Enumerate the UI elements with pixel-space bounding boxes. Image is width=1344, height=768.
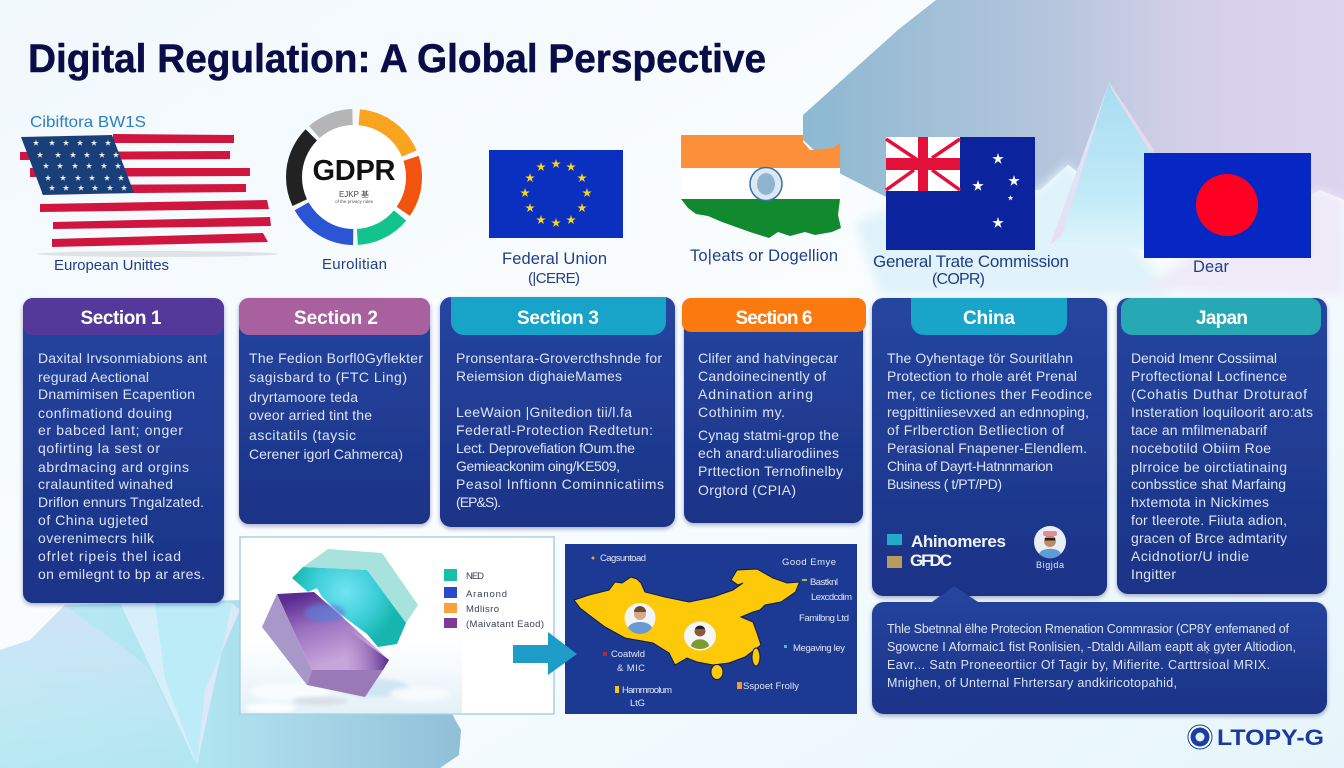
- text block: Section 3 body: LeeWaion |Gnitedion tii/l.fa: [456, 404, 632, 420]
- text block: Section 1 body: er babced lant; onger: [38, 422, 183, 438]
- map labels: [592, 553, 852, 709]
- text block: Section 6 body: [698, 350, 843, 498]
- text block: Section 6 body: Adnination aring: [698, 386, 813, 402]
- text block: Section 3 body: Gemieackonim oing/KE509,: [456, 458, 620, 474]
- text block: China body: Protection to rhole arét Prenal: [887, 368, 1077, 384]
- flag block: United States: European Unittes: [54, 257, 169, 274]
- flag block: Australia: General Trate Commission: [873, 252, 1069, 271]
- text block: Section 6 body: Candoinecinently of: [698, 368, 826, 384]
- legend: crystal chart: NED: [466, 571, 484, 582]
- text block: China body: of Frlberction Betliection of: [887, 422, 1064, 438]
- text block: Japan body: for tleerote. Fiiuta adion,: [1131, 512, 1287, 528]
- text block: Section 6 body: Cothinim my.: [698, 404, 785, 420]
- GDPR ring badge: EJKP 基: [339, 189, 369, 199]
- panel: crystal chart: [240, 537, 554, 714]
- title: Digital Regulation: A Global Perspective: [28, 37, 766, 81]
- panel: Section 1: [23, 298, 224, 603]
- text block: Section 6 body: ech anard:uliarodiines: [698, 445, 839, 461]
- panel: China: [872, 298, 1107, 596]
- panel: Section 3: [440, 297, 675, 527]
- flag block: Australia: (COPR): [932, 271, 985, 288]
- text block: Section 3 body: Reiemsion dighaieMames: [456, 368, 622, 384]
- flag block: European Union: [489, 150, 623, 287]
- GDPR ring badge: of the privacy rules: [335, 199, 374, 204]
- text block: Section 3 body: [456, 350, 664, 510]
- icon: map portrait right: [684, 622, 716, 650]
- text block: Japan body: Proftectional Locfinence: [1131, 368, 1287, 384]
- heading: Japan: [1121, 298, 1321, 335]
- text block: Section 2 body: The Fedion Borfl0Gyflekter: [249, 350, 423, 366]
- icon: portrait: [1034, 526, 1066, 570]
- text block: Section 2 body: Cerener igorl Cahmerca): [249, 446, 403, 462]
- legend: crystal chart: Mdlisro: [466, 604, 499, 615]
- text block: Section 3 body: Lect. Deprovefiation fOum.the: [456, 440, 635, 456]
- flag block: India: To|eats or Dogellion: [690, 247, 838, 265]
- heading: Section 6: Section 6: [736, 308, 812, 329]
- heading: Section 3: [451, 297, 666, 335]
- text block: Section 1 body: abrdmacing ard orgins: [38, 459, 189, 475]
- map labels: Bastknl: [810, 577, 838, 588]
- text block: China body: Perasional Fnapener-Elendlem.: [887, 440, 1087, 456]
- text block: Section 6 body: Orgtord (CPIA): [698, 482, 796, 498]
- text block: Japan body: hxtemota in Nickimes: [1131, 494, 1269, 510]
- icon: map portrait left: [624, 603, 656, 634]
- icon: purple crystal: [262, 592, 389, 697]
- heading: Section 6: [682, 298, 866, 332]
- text block: Section 3 body: Peasol Inftionn Cominnicatiims: [456, 476, 664, 492]
- panel: Section 6: [682, 298, 866, 523]
- callout: bottom right: Sgowcne I Aformaic1 fist Ronlisien, -Dtaldı Aillam eaptt aķ gyter Altiodion,: [887, 640, 1296, 654]
- text block: China body: [887, 350, 1092, 492]
- legend: China agencies: Ahinomeres: [911, 532, 1006, 551]
- text block: Japan body: Ingitter: [1131, 566, 1176, 582]
- callout: bottom right: Eavr... Satn Proneeortiicr Of Tagir by, Mifierite. Carttrsioal MRIX.: [887, 658, 1270, 672]
- text block: Section 1 body: Dnamimisen Ecapention: [38, 386, 195, 402]
- flag block: European Union: (|CERE): [528, 270, 580, 287]
- text block: Japan body: Insteration loquiloorit aro:ats: [1131, 404, 1313, 420]
- legend: crystal chart: [444, 569, 544, 630]
- map labels: Good Emye: [782, 557, 836, 568]
- text block: China body: mer, ce tictiones ther Feodince: [887, 386, 1092, 402]
- flag block: United States: Cibiftora BW1S: [30, 114, 146, 131]
- map labels: Megaving ley: [793, 643, 845, 654]
- text block: Section 2 body: sagisbard to (FTC Ling): [249, 369, 407, 385]
- text block: Section 2 body: oveor arried tint the: [249, 407, 372, 423]
- map labels: Sspoet Frolly: [743, 681, 799, 692]
- text block: Section 1 body: [38, 350, 207, 582]
- text block: China body: China of Dayrt-Hatnnmarion: [887, 458, 1053, 474]
- text block: Japan body: Acidnotior/U indie: [1131, 548, 1249, 564]
- map labels: Lexcdcdim: [811, 592, 852, 603]
- map labels: Hammroolum: [622, 685, 672, 696]
- text block: Section 6 body: Cynag statmi-grop the: [698, 427, 839, 443]
- callout: bottom right: [872, 586, 1327, 714]
- arrow: [513, 632, 577, 675]
- text block: Section 1 body: of China ugjeted: [38, 512, 148, 528]
- text block: Section 2 body: [249, 350, 423, 462]
- text block: China body: regpittiniiesevxed an ednnoping,: [887, 404, 1089, 420]
- text block: Section 1 body: qofirting la sest or: [38, 440, 160, 456]
- heading: Section 1: Section 1: [80, 308, 162, 329]
- text block: Section 2 body: ascitatils (taysic: [249, 427, 356, 443]
- text block: Section 1 body: regurad Aectional: [38, 369, 149, 385]
- legend: China agencies: GFDC: [910, 551, 952, 570]
- icon: portrait: Bigjda: [1036, 560, 1064, 570]
- text block: Section 3 body: (EP&S).: [456, 494, 501, 510]
- heading: China: [911, 298, 1067, 335]
- flag block: United States: [20, 114, 278, 274]
- flag block: European Union: Federal Union: [502, 250, 607, 268]
- flag block: Australia: [873, 137, 1069, 288]
- callout: bottom right: Thle Sbetnnal ëlhe Protecion Rmenation Commrasior (CP8Y enfemaned of: [887, 622, 1290, 636]
- text block: Section 1 body: on emilegnt to bp ar ares.: [38, 566, 205, 582]
- text block: Section 3 body: Pronsentara-Grovercthshnde for: [456, 350, 662, 366]
- text block: Section 6 body: Prttection Ternofinelby: [698, 463, 843, 479]
- text block: Section 1 body: Driflon ennurs Tngalzated.: [38, 494, 204, 510]
- flag block: India: [681, 135, 841, 265]
- heading: Japan: Japan: [1196, 308, 1248, 329]
- text block: Japan body: tace an mfilmenabarif: [1131, 422, 1267, 438]
- flag block: Japan: [1144, 153, 1311, 276]
- text block: China body: The Oyhentage tör Souritlahn: [887, 350, 1073, 366]
- text block: Japan body: conbsstice shat Marfaing: [1131, 476, 1286, 492]
- icon: teal crystal: [292, 549, 418, 647]
- legend: crystal chart: (Maivatant Eaod): [466, 619, 544, 630]
- text block: China body: Business ( t/PT/PD): [887, 476, 1002, 492]
- text block: Section 2 body: dryrtamoore teda: [249, 389, 358, 405]
- text block: Section 1 body: confimationd douing: [38, 405, 172, 421]
- legend: crystal chart: Aranond: [466, 589, 507, 600]
- heading: Section 1: [23, 298, 224, 335]
- text block: Japan body: (Cohatis Duthar Droturaof: [1131, 386, 1307, 402]
- text block: Section 1 body: Daxital Irvsonmiabions ant: [38, 350, 207, 366]
- flag block: Japan: Dear: [1193, 258, 1230, 276]
- text block: Japan body: [1131, 350, 1313, 582]
- map labels: & MIC: [617, 663, 645, 674]
- panel: Section 2: [239, 298, 430, 524]
- map labels: Cagsuntoad: [600, 553, 646, 564]
- GDPR ring badge: GDPR: [312, 155, 396, 187]
- map labels: LtG: [630, 698, 645, 709]
- heading: Section 2: Section 2: [294, 308, 378, 329]
- logo: [1188, 725, 1324, 750]
- logo: LTOPY-G: [1217, 725, 1324, 750]
- text block: Japan body: nocebotild Obiim Roe: [1131, 440, 1271, 456]
- text block: Japan body: plrroice be oirctiatinaing: [1131, 459, 1287, 475]
- text block: Section 1 body: ofrlet ripeis thel icad: [38, 548, 181, 564]
- text block: Section 1 body: overenimecrs hilk: [38, 530, 155, 546]
- text block: Japan body: Denoid Imenr Cossiimal: [1131, 350, 1277, 366]
- text block: Section 3 body: Federatl-Protection Redtetun:: [456, 422, 653, 438]
- callout: bottom right: Mnighen, of Unternal Fhrtersary andkiricotopahid,: [887, 676, 1177, 690]
- heading: Section 2: [239, 298, 430, 335]
- text block: Japan body: gracen of Brce admtarity: [1131, 530, 1287, 546]
- map labels: Familbng Ltd: [799, 613, 849, 624]
- panel: China map: [565, 544, 857, 714]
- GDPR ring badge: Eurolitian: [322, 256, 387, 273]
- GDPR ring badge: [294, 117, 414, 273]
- map labels: Coatwld: [611, 649, 645, 660]
- map shape: China: [574, 569, 800, 680]
- legend: China agencies: [887, 532, 1006, 570]
- heading: Section 3: Section 3: [517, 308, 599, 329]
- text block: Section 1 body: cralauntited winahed: [38, 476, 173, 492]
- text block: Section 6 body: Clifer and hatvingecar: [698, 350, 838, 366]
- heading: China: China: [963, 308, 1015, 329]
- panel: Japan: [1117, 298, 1327, 594]
